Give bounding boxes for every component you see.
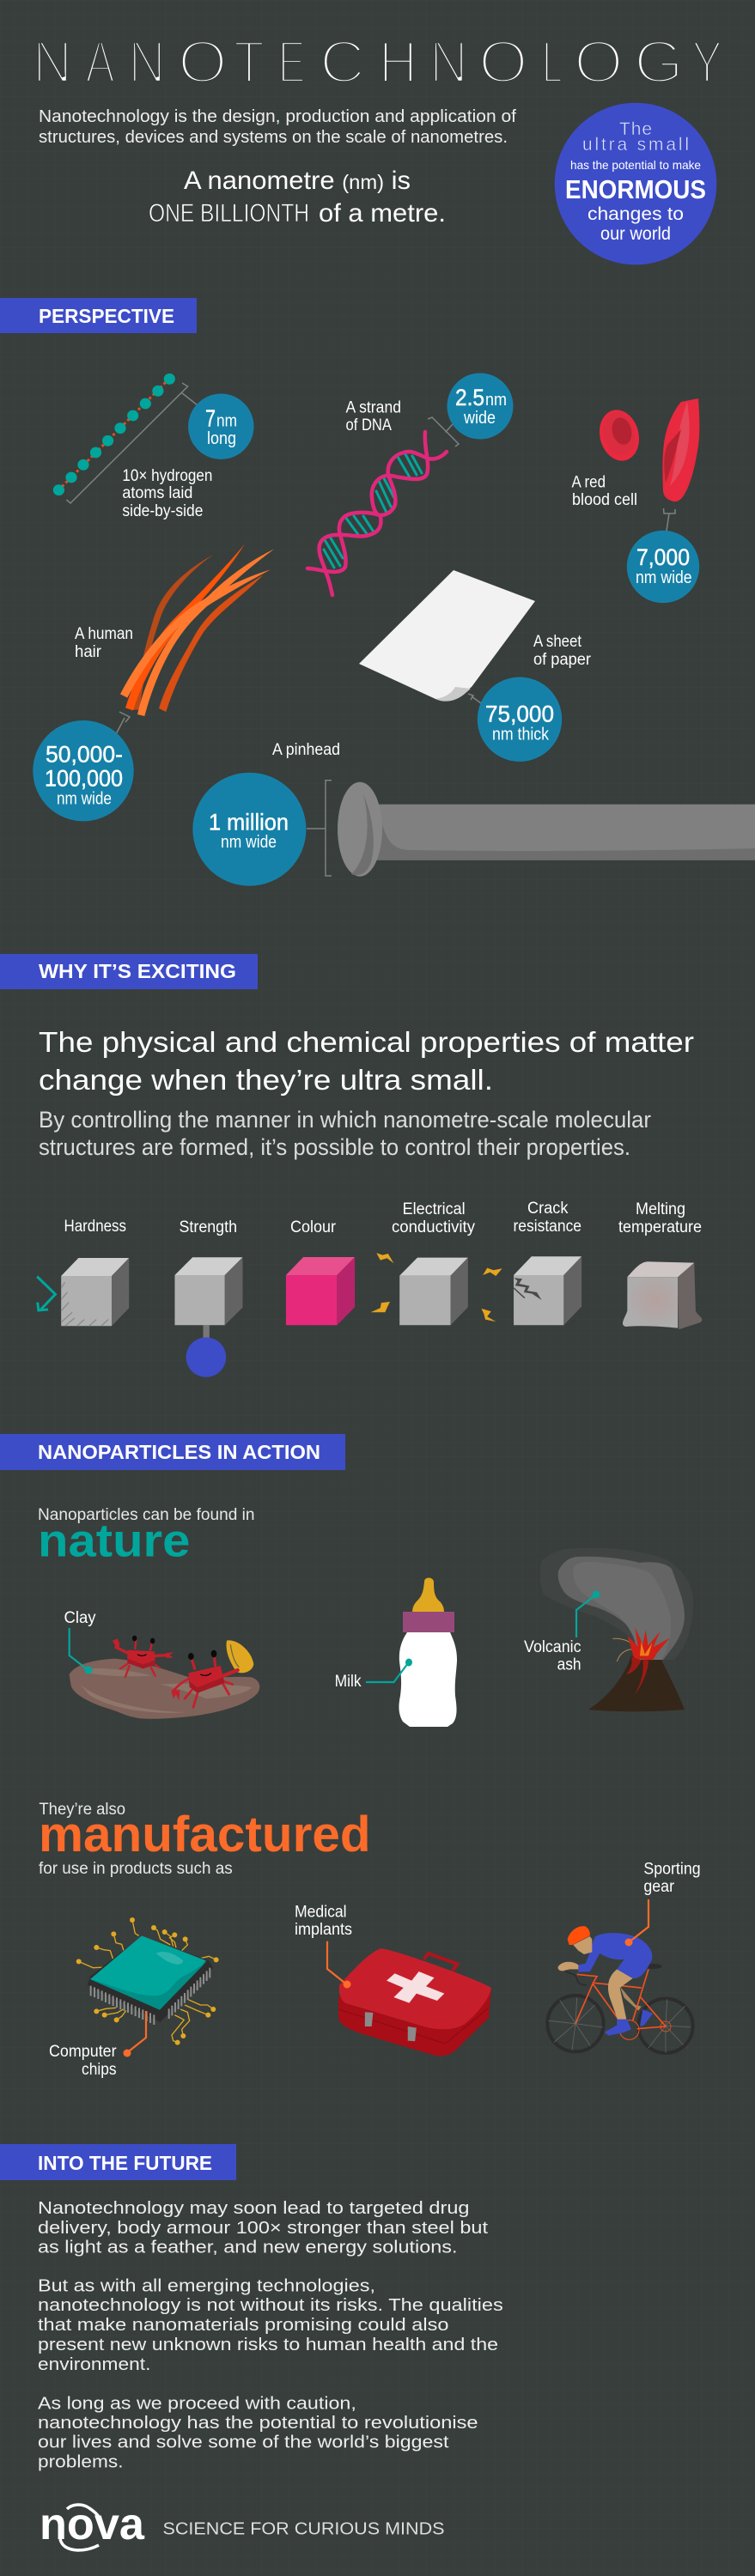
badge: 50,000-100,000 nm wide: 50,000-: [46, 742, 123, 768]
nanometre definition: of a metre.: [319, 199, 446, 228]
tagline: SCIENCE FOR CURIOUS MINDS: [163, 2520, 445, 2539]
property labels: temperature: [618, 1218, 702, 1236]
property labels: conductivity: [392, 1218, 475, 1236]
section heading: perspective: PERSPECTIVE: [39, 305, 174, 327]
circuit wires: [79, 1920, 216, 2043]
badge: 2.5nm wide: nm: [485, 391, 507, 410]
text: future paragraph 1: as light as a feather, and new energy solutions.: [38, 2238, 457, 2257]
badge: 7nm long: long: [207, 429, 236, 448]
text: future paragraph 1: delivery, body armour 100× stronger than steel but: [38, 2219, 489, 2238]
title: N: [33, 28, 72, 95]
subheading text: By controlling the manner in which nanometre-scale molecular: [39, 1107, 651, 1133]
label: sheet of paper: of paper: [533, 651, 592, 669]
label: medical implants: [295, 1904, 352, 1939]
pointer: medical implants: [327, 1941, 350, 1989]
title: O: [478, 28, 528, 95]
label: DNA: A strand: [345, 399, 401, 417]
title: T: [234, 28, 265, 95]
icon: large crab: [171, 1650, 238, 1707]
subheading text: structures are formed, it’s possible to control their properties.: [39, 1134, 630, 1160]
text: future paragraph 2: nanotechnology is not without its risks. The qualities: [38, 2296, 503, 2315]
label: DNA: [345, 399, 401, 434]
badge: 75,000 nm thick: 75,000: [485, 702, 554, 727]
nanometre definition: A nanometre (nm) is: [184, 167, 411, 195]
text: future paragraph 2: environment.: [38, 2355, 150, 2374]
section heading: into the future: [0, 2144, 236, 2180]
callout: ultra small circle: The: [619, 119, 652, 139]
bicycle frame: [575, 1969, 671, 2039]
label: human hair: [75, 625, 133, 661]
headline: The physical and chemical properties of matter: [39, 1026, 694, 1058]
icon: electrical conductivity cube: [371, 1253, 502, 1325]
title: O: [178, 28, 228, 95]
title: E: [278, 28, 306, 95]
illustration: medical kit: [338, 1948, 491, 2057]
label: human hair: A human: [75, 625, 133, 643]
pointer: sporting gear: [625, 1899, 648, 1946]
badge: 1 million nm wide: [192, 773, 306, 886]
text: future paragraph 3: problems.: [38, 2452, 124, 2471]
title: [33, 28, 722, 95]
subheading text: [39, 1107, 651, 1160]
illustration: cyclist: [547, 1926, 693, 2053]
bicycle wheels: [547, 1996, 693, 2053]
label: DNA: of DNA: [345, 416, 392, 434]
label: red blood cell: [572, 474, 637, 509]
badge: 7,000 nm wide: [627, 531, 699, 603]
logo: nova: nova: [40, 2500, 145, 2549]
badge: 2.5nm wide: wide: [463, 409, 496, 428]
property labels: Hardness: [64, 1218, 126, 1236]
icon: small crab: [113, 1636, 174, 1677]
section heading: nanoparticles in action: NANOPARTICLES IN ACTION: [38, 1441, 320, 1463]
intro text: [39, 107, 516, 147]
illustration: sheet of paper: [359, 570, 535, 703]
title: N: [429, 28, 468, 95]
text: future paragraph 3: our lives and solve some of the world’s biggest: [38, 2433, 449, 2452]
label: red blood cell: A red: [572, 474, 606, 492]
title: L: [542, 28, 563, 95]
text: found in nature: [38, 1506, 254, 1567]
illustration: clay with crabs: [70, 1636, 259, 1719]
text: future paragraph 3: As long as we proceed with caution,: [38, 2394, 356, 2413]
callout: ultra small circle: [555, 103, 716, 264]
label: sporting gear: Sporting: [643, 1861, 701, 1879]
illustration: human hair: [120, 544, 274, 716]
label: clay: Clay: [64, 1609, 96, 1627]
callout: ultra small circle: ENORMOUS: [565, 174, 706, 204]
property labels: Strength: [179, 1218, 237, 1236]
smoke plume: [540, 1548, 693, 1660]
label: computer chips: chips: [82, 2061, 117, 2079]
label: hydrogen atoms: 10× hydrogen: [122, 467, 212, 485]
intro text: structures, devices and systems on the scale of nanometres.: [39, 128, 508, 147]
nanometre definition: ONE BILLIONTH: [149, 199, 309, 228]
label: milk: Milk: [335, 1673, 362, 1691]
illustration: volcano: [540, 1548, 693, 1711]
headline: [39, 1026, 694, 1096]
callout: ultra small circle: ultra small: [582, 135, 689, 155]
label: medical implants: implants: [295, 1921, 352, 1939]
text: future paragraph 2: present new unknown risks to human health and the: [38, 2336, 498, 2354]
badge: 7nm long: 7: [205, 405, 216, 432]
section heading: perspective: [0, 298, 197, 333]
badge: 75,000 nm thick: nm thick: [492, 726, 550, 744]
property labels: Melting: [636, 1200, 685, 1218]
text: future paragraph 3: [38, 2394, 478, 2471]
icon: melting cube: [623, 1261, 702, 1329]
icon: strength cube: [174, 1257, 242, 1377]
label: sheet of paper: [533, 633, 592, 669]
callout: ultra small circle: has the potential to make: [570, 158, 701, 172]
property labels: [64, 1200, 702, 1236]
illustration: DNA: [307, 417, 459, 595]
badge: 7nm long: nm: [216, 412, 237, 431]
property labels: Colour: [290, 1218, 337, 1236]
label: hydrogen atoms: atoms laid: [122, 484, 192, 502]
nanometre definition: [149, 167, 446, 228]
text: found in nature: nature: [38, 1516, 190, 1567]
icon: colour cube: [286, 1257, 355, 1325]
badge: 50,000-100,000 nm wide: 100,000: [45, 766, 123, 792]
label: hydrogen atoms: side-by-side: [122, 502, 203, 520]
title: Y: [691, 28, 722, 95]
text: future paragraph 2: But as with all emerging technologies,: [38, 2277, 375, 2296]
badge: 1 million nm wide: 1 million: [209, 810, 289, 835]
callout: ultra small circle: changes to: [588, 204, 684, 224]
label: computer chips: Computer: [49, 2043, 117, 2061]
badge: 7nm long: [188, 393, 254, 459]
text: future paragraph 1: Nanotechnology may soon lead to targeted drug: [38, 2199, 469, 2218]
label: volcanic ash: Volcanic: [524, 1638, 581, 1656]
label: volcanic ash: ash: [557, 1656, 581, 1674]
pointer: computer chips: [124, 2011, 146, 2057]
pointer: milk: [366, 1659, 412, 1682]
section heading: nanoparticles in action: [0, 1434, 345, 1470]
text: future paragraph 3: nanotechnology has the potential to revolutionise: [38, 2414, 478, 2433]
label: sporting gear: [643, 1861, 701, 1896]
intro text: Nanotechnology is the design, production and application of: [39, 107, 516, 126]
icon: crack resistance cube: [514, 1256, 581, 1325]
illustration: baby bottle: [399, 1578, 457, 1727]
far leg: [620, 1986, 642, 2011]
badge: 2.5nm wide: 2.5: [455, 385, 484, 410]
label: volcanic ash: [524, 1638, 581, 1674]
label: human hair: hair: [75, 643, 102, 661]
text: manufactured: manufactured: [39, 1807, 371, 1862]
icon: hardness cube: [37, 1258, 129, 1326]
label: computer chips: [49, 2043, 117, 2079]
title: N: [128, 28, 166, 95]
icon: mussel shell: [227, 1640, 253, 1673]
section heading: why it's exciting: WHY IT’S EXCITING: [39, 960, 236, 982]
label: sheet of paper: A sheet: [533, 633, 582, 651]
text: future paragraph 1: [38, 2199, 489, 2257]
title: A: [85, 28, 115, 95]
connector: hair to badge: [116, 712, 130, 734]
label: medical implants: Medical: [295, 1904, 347, 1922]
callout: ultra small circle: our world: [600, 224, 671, 244]
property labels: Crack: [527, 1200, 569, 1218]
text: future paragraph 2: [38, 2277, 503, 2374]
section heading: into the future: INTO THE FUTURE: [38, 2152, 212, 2174]
illustration: computer chip: [76, 1917, 219, 2045]
text: future paragraph 2: that make nanomaterials promising could also: [38, 2316, 448, 2335]
section heading: why it's exciting: [0, 954, 258, 989]
illustration: red blood cells: [594, 398, 699, 531]
text: found in nature: Nanoparticles can be found in: [38, 1506, 254, 1524]
badge: 7,000 nm wide: nm wide: [636, 568, 692, 587]
rider: [558, 1926, 653, 2036]
badge: 2.5nm wide: [447, 373, 514, 440]
text: manufactured: for use in products such as: [39, 1860, 233, 1878]
badge: 7,000 nm wide: 7,000: [636, 544, 690, 570]
title: O: [574, 28, 624, 95]
title: C: [320, 28, 365, 95]
property labels: resistance: [514, 1218, 581, 1236]
badge: 1 million nm wide: nm wide: [221, 833, 277, 852]
badge: 50,000-100,000 nm wide: nm wide: [57, 790, 112, 809]
label: red blood cell: blood cell: [572, 491, 637, 509]
label: pinhead: A pinhead: [272, 741, 340, 759]
illustration: pinhead: [307, 781, 755, 877]
property labels: Electrical: [403, 1200, 466, 1218]
label: hydrogen atoms: [122, 467, 212, 520]
title: H: [379, 28, 417, 95]
headline: change when they’re ultra small.: [39, 1064, 493, 1096]
badge: 75,000 nm thick: [478, 677, 562, 762]
pointer: volcanic ash: [576, 1590, 600, 1637]
illustration: hydrogen atoms: [53, 374, 198, 503]
badge: 50,000-100,000 nm wide: [33, 720, 134, 821]
text: manufactured: They’re also: [39, 1801, 125, 1819]
title: G: [634, 28, 684, 95]
label: sporting gear: gear: [643, 1878, 675, 1896]
pointer: clay: [70, 1628, 93, 1674]
